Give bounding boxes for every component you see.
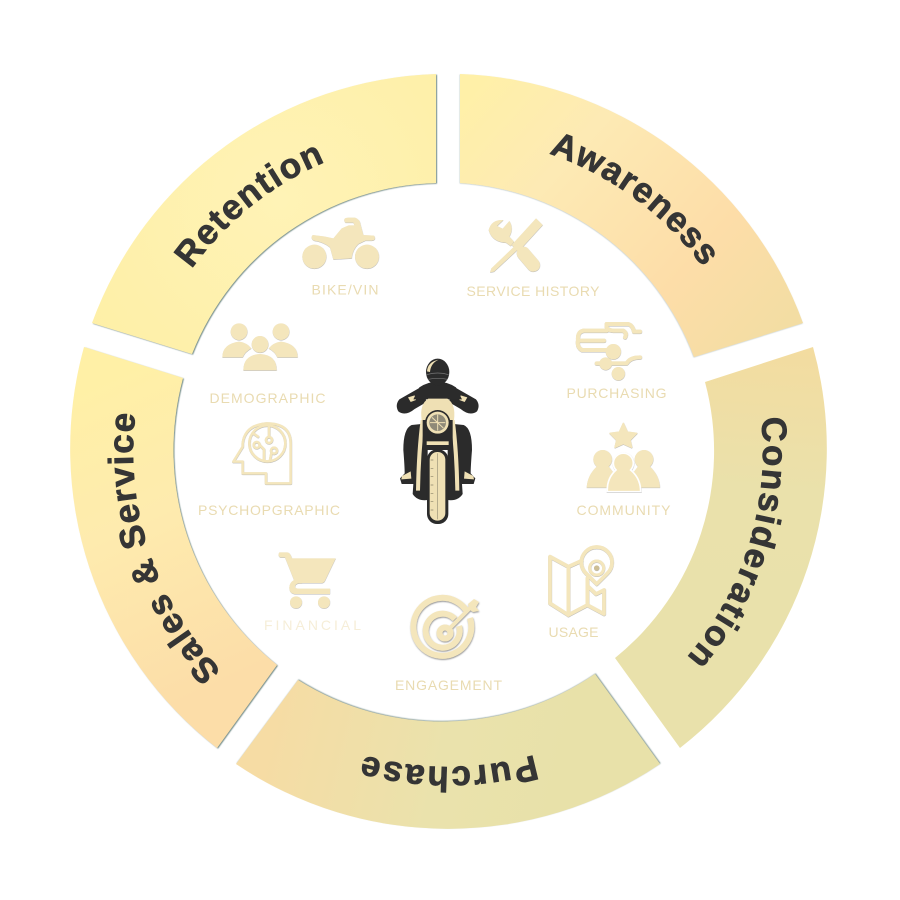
icon: community with star — [587, 423, 660, 492]
segment: Consideration: Consideration — [688, 418, 787, 666]
label: PSYCHOPGRAPHIC: PSYCHOPGRAPHIC — [198, 502, 340, 518]
label: ENGAGEMENT: ENGAGEMENT — [395, 677, 502, 693]
icon: map with pin — [550, 547, 612, 615]
segment: Consideration — [615, 347, 827, 748]
segment: Purchase: Purchase — [362, 755, 538, 793]
icon: purchasing hand — [578, 324, 640, 380]
label: FINANCIAL: FINANCIAL — [264, 617, 361, 633]
label: PURCHASING: PURCHASING — [566, 385, 666, 401]
segment: Sales & Service — [70, 347, 278, 750]
segment: Retention — [92, 74, 438, 356]
segment: Awareness — [459, 74, 803, 358]
segment: Purchase — [236, 672, 661, 829]
icon: shopping cart — [278, 552, 336, 608]
segment: Retention: Retention — [173, 147, 324, 268]
icon: head with circuit brain — [233, 423, 291, 483]
segment: Sales & Service: Sales & Service — [107, 414, 218, 684]
icon: demographic group — [222, 323, 298, 370]
label: COMMUNITY: COMMUNITY — [576, 502, 671, 518]
label: SERVICE HISTORY: SERVICE HISTORY — [466, 283, 600, 299]
segment: Awareness: Awareness — [549, 134, 715, 264]
icon: motorcycle rider — [397, 359, 479, 524]
label: BIKE/VIN: BIKE/VIN — [312, 282, 378, 298]
label: DEMOGRAPHIC: DEMOGRAPHIC — [210, 390, 326, 406]
icon: motorbike — [302, 218, 379, 269]
label: USAGE: USAGE — [548, 624, 598, 640]
icon: target with arrow — [413, 598, 479, 656]
icon: wrench and screwdriver — [489, 218, 543, 272]
